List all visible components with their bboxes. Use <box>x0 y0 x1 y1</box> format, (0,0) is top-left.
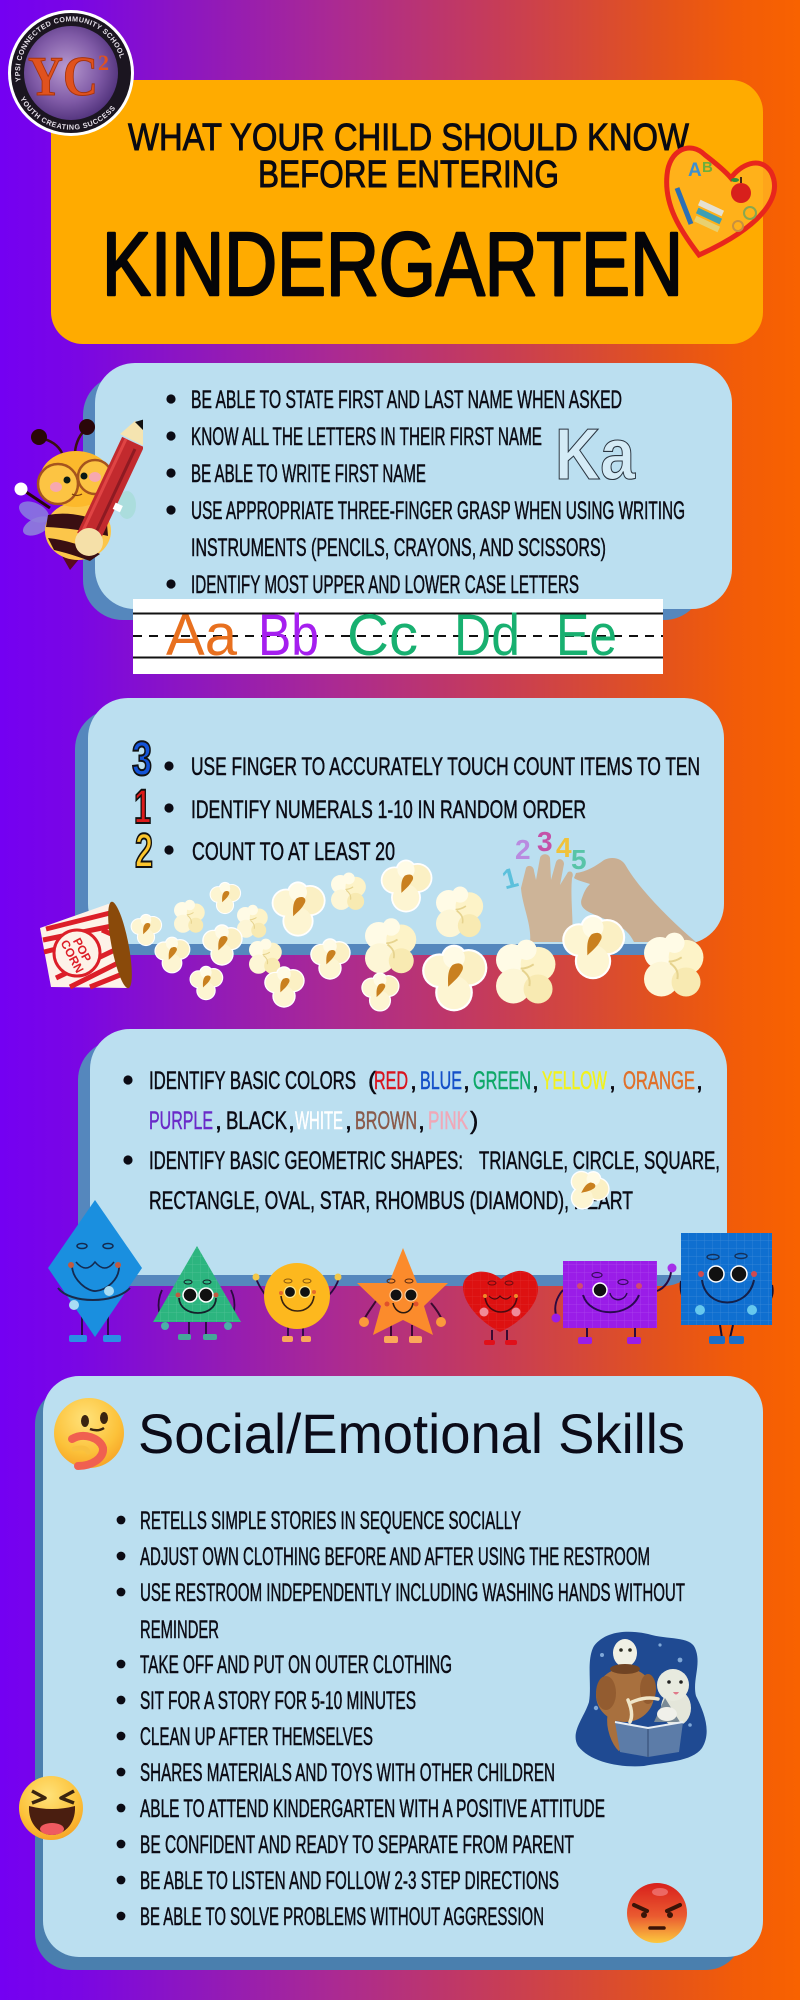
illustration: square character <box>552 1261 676 1344</box>
list: social emotional: BE ABLE TO SOLVE PROBLEMS WITHOUT AGGRESSION <box>140 1903 544 1931</box>
list: numbers: IDENTIFY NUMERALS 1-10 IN RANDOM ORDER <box>191 796 586 824</box>
list: colors and shapes: PURPLE <box>149 1107 213 1135</box>
list: colors and shapes: GREEN <box>473 1067 531 1095</box>
list: social emotional: TAKE OFF AND PUT ON OUTER CLOTHING <box>140 1651 452 1679</box>
list: colors and shapes: , <box>463 1067 470 1095</box>
list: social emotional: SIT FOR A STORY FOR 5-10 MINUTES <box>140 1687 416 1715</box>
list: colors and shapes: IDENTIFY BASIC COLORS <box>149 1067 356 1095</box>
illustration: rhombus character <box>48 1200 142 1342</box>
logo: YC2 badge <box>8 10 134 136</box>
heading: what your child should know: BEFORE ENTERING <box>258 154 559 196</box>
list: colors and shapes: PINK <box>428 1107 468 1135</box>
list: social emotional: RETELLS SIMPLE STORIES IN SEQUENCE SOCIALLY <box>140 1507 521 1535</box>
icon: laughing emoji <box>19 1776 83 1840</box>
list: colors and shapes: ( <box>368 1067 377 1095</box>
panel: handwriting strip Aa Bb Cc Dd Ee: Bb <box>258 603 319 668</box>
list: colors and shapes: BROWN <box>355 1107 417 1135</box>
panel: literacy skills <box>83 363 732 620</box>
panel: handwriting strip Aa Bb Cc Dd Ee: Cc <box>347 603 418 668</box>
illustration: animals reading a book <box>576 1632 707 1766</box>
icon: colored numbers 3 1 2: 1 <box>134 781 151 834</box>
list: colors and shapes: ORANGE <box>623 1067 695 1095</box>
illustration: popcorn bucket: CORN <box>58 938 86 975</box>
illustration: popcorn bucket <box>40 900 137 990</box>
logo: YC2 badge: YC <box>28 46 98 108</box>
list: social emotional: CLEAN UP AFTER THEMSELVES <box>140 1723 373 1751</box>
illustration: hands counting numbers: 2 <box>515 834 531 865</box>
title: kindergarten: KINDERGARTEN <box>102 215 683 315</box>
panel: social emotional skills <box>35 1376 763 1970</box>
list: literacy: KNOW ALL THE LETTERS IN THEIR FIRST NAME <box>191 423 542 451</box>
illustration: bee with pencil <box>14 419 146 570</box>
illustration: triangle character <box>153 1246 241 1340</box>
list: colors and shapes: BLACK <box>226 1107 287 1135</box>
logo: YC2 badge: 2 <box>98 50 109 75</box>
list: numbers <box>164 753 700 866</box>
illustration: hands counting numbers: 1 <box>499 862 521 895</box>
illustration: hands counting numbers: 5 <box>571 844 587 875</box>
panel: handwriting strip Aa Bb Cc Dd Ee: Dd <box>454 603 520 668</box>
list: social emotional <box>117 1507 685 1931</box>
list: social emotional: REMINDER <box>140 1616 219 1644</box>
icon: angry emoji <box>627 1883 687 1943</box>
icon: hugging emoji <box>54 1398 124 1468</box>
list: literacy <box>166 386 685 599</box>
list: colors and shapes: , <box>410 1067 417 1095</box>
list: colors and shapes: WHITE <box>295 1107 343 1135</box>
list: colors and shapes: , <box>696 1067 703 1095</box>
illustration: hands counting numbers <box>499 826 696 942</box>
panel: numbers <box>75 698 724 955</box>
illustration: circle character <box>252 1263 342 1342</box>
illustration: hands counting numbers: 3 <box>537 826 553 857</box>
list: colors and shapes: , <box>532 1067 539 1095</box>
icon: school heart <box>667 148 774 255</box>
panel: header <box>51 80 763 344</box>
illustration: star character <box>357 1248 448 1343</box>
heading: social emotional skills: Social/Emotional Skills <box>138 1402 685 1465</box>
logo: YC2 badge: YOUTH CREATING SUCCESS <box>21 96 115 130</box>
list: colors and shapes <box>123 1067 720 1215</box>
list: numbers: COUNT TO AT LEAST 20 <box>192 838 395 866</box>
list: colors and shapes: , <box>418 1107 425 1135</box>
panel: handwriting strip Aa Bb Cc Dd Ee: Ee <box>556 603 617 668</box>
icon: colored numbers 3 1 2 <box>132 733 153 878</box>
list: colors and shapes: , <box>288 1107 295 1135</box>
icon: colored numbers 3 1 2: 3 <box>132 733 152 786</box>
illustration: popcorn bucket: POP <box>70 935 94 964</box>
icon: school heart: A <box>688 160 702 181</box>
icon: colored numbers 3 1 2: 2 <box>135 825 153 878</box>
list: colors and shapes: , <box>215 1107 222 1135</box>
list: colors and shapes: RED <box>374 1067 408 1095</box>
panel: handwriting strip Aa Bb Cc Dd Ee: Aa <box>166 603 238 668</box>
list: colors and shapes: YELLOW <box>542 1067 607 1095</box>
heading: what your child should know: WHAT YOUR CHILD SHOULD KNOW <box>128 117 689 159</box>
list: colors and shapes: , <box>609 1067 616 1095</box>
illustration: popcorn kernels <box>131 860 703 1218</box>
logo: YC2 badge: YPSI CONNECTED COMMUNITY SCHOOL <box>15 16 124 82</box>
list: literacy: BE ABLE TO WRITE FIRST NAME <box>191 460 426 488</box>
illustration: heart character <box>463 1271 538 1345</box>
list: colors and shapes: BLUE <box>420 1067 462 1095</box>
list: colors and shapes: IDENTIFY BASIC GEOMETRIC SHAPES: <box>149 1147 463 1175</box>
illustration: hands counting numbers: 4 <box>556 832 572 863</box>
icon: traced Ka letters: Ka <box>555 415 636 495</box>
heading: what your child should know <box>128 117 689 196</box>
illustration: blue rectangle character <box>681 1233 773 1344</box>
panel: colors and shapes <box>78 1029 727 1286</box>
list: colors and shapes: ) <box>470 1107 478 1135</box>
icon: school heart: B <box>702 159 713 176</box>
panel: handwriting strip Aa Bb Cc Dd Ee <box>133 599 663 674</box>
list: colors and shapes: , <box>345 1107 352 1135</box>
